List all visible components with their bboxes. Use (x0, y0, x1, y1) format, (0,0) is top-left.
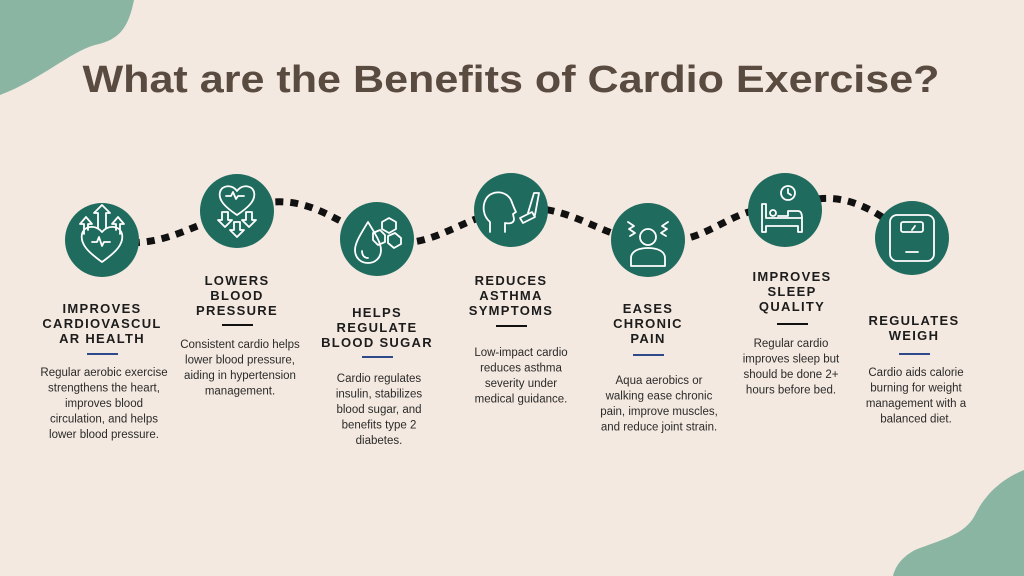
step 5: eases chronic pain (600, 203, 718, 434)
step 7: regulates weight (866, 201, 967, 426)
step 6: improves sleep quality: SLEEP (767, 284, 817, 299)
step 7: regulates weight: management with a (866, 398, 967, 410)
step 5: eases chronic pain: Aqua aerobics or (616, 375, 703, 387)
step 7: regulates weight: balanced diet. (880, 414, 952, 426)
step 3: helps regulate blood sugar: insulin, stabilizes (336, 388, 422, 400)
step 3: helps regulate blood sugar: BLOOD SUGAR (321, 335, 433, 350)
step 4: reduces asthma symptoms: reduces asthma (480, 362, 563, 374)
step 1: improves cardiovascular health: IMPROVES (62, 301, 142, 316)
icon: head and inhaler (484, 192, 539, 232)
step 5: eases chronic pain: PAIN (630, 331, 666, 346)
step 1: improves cardiovascular health: Regular aerobic exercise (40, 367, 168, 379)
step 4: reduces asthma symptoms: SYMPTOMS (469, 303, 553, 318)
step 2: lowers blood pressure: Consistent cardio helps (180, 339, 300, 351)
step 5: eases chronic pain: pain, improve muscles, (600, 406, 718, 418)
step 6: improves sleep quality: should be done 2+ (744, 369, 839, 381)
dotted wave connector (102, 198, 912, 243)
step 5: eases chronic pain: CHRONIC (613, 316, 683, 331)
step 6: improves sleep quality: improves sleep but (743, 354, 840, 366)
step 5: eases chronic pain: and reduce joint strain. (601, 422, 717, 434)
step 2: lowers blood pressure: PRESSURE (196, 303, 278, 318)
step 4: reduces asthma symptoms: Low-impact cardio (474, 347, 568, 359)
blob: bottom-right corner (893, 470, 1024, 576)
step 1: improves cardiovascular health (40, 203, 168, 441)
step 2: lowers blood pressure: BLOOD (210, 288, 264, 303)
step 5: eases chronic pain: walking ease chronic (605, 390, 713, 402)
step 7: regulates weight: burning for weight (870, 382, 963, 394)
step 6: improves sleep quality: hours before bed. (746, 384, 836, 396)
step 5: eases chronic pain: EASES (623, 301, 673, 316)
step 1: improves cardiovascular health: strengthens the heart, (48, 382, 160, 394)
step 4: reduces asthma symptoms: medical guidance. (475, 394, 567, 406)
step 3: helps regulate blood sugar: Cardio regulates (337, 373, 421, 385)
step 2: lowers blood pressure: aiding in hypertension (184, 370, 296, 382)
blob: top-left corner (0, 0, 134, 95)
step 3: helps regulate blood sugar: HELPS (352, 305, 402, 320)
step 1: improves cardiovascular health: circulation, and helps (50, 414, 158, 426)
step 6: improves sleep quality: IMPROVES (752, 269, 832, 284)
icon: heart with down arrows (218, 186, 256, 237)
step 2: lowers blood pressure: lower blood pressure, (185, 354, 295, 366)
icon: drop and sugar cubes (355, 218, 401, 263)
step 6: improves sleep quality: QUALITY (759, 299, 825, 314)
step 7: regulates weight: Cardio aids calorie (868, 367, 964, 379)
icon: scale (890, 215, 934, 261)
icon: person with pain bolts (628, 222, 668, 266)
step 2: lowers blood pressure: LOWERS (205, 273, 269, 288)
step 1: improves cardiovascular health: lower blood pressure. (49, 429, 159, 441)
step 6: improves sleep quality (743, 173, 840, 396)
icon: heart with arrows (80, 205, 124, 262)
step 7: regulates weight: REGULATES (869, 313, 959, 328)
step 4: reduces asthma symptoms: severity under (485, 378, 557, 390)
step 6: improves sleep quality: Regular cardio (754, 338, 828, 350)
step 1: improves cardiovascular health: CARDIOVASCUL (42, 316, 162, 331)
step 3: helps regulate blood sugar: diabetes. (356, 435, 402, 447)
step 7: regulates weight: WEIGH (889, 328, 939, 343)
step 3: helps regulate blood sugar: benefits type 2 (342, 420, 416, 432)
step 1: improves cardiovascular health: improves blood (65, 398, 143, 410)
step 1: improves cardiovascular health: AR HEALTH (59, 331, 145, 346)
title: What are the Benefits of Cardio Exercise? (82, 59, 940, 101)
step 2: lowers blood pressure (180, 174, 300, 398)
step 2: lowers blood pressure: management. (205, 386, 275, 398)
step 4: reduces asthma symptoms: REDUCES (475, 273, 547, 288)
step 3: helps regulate blood sugar: blood sugar, and (336, 404, 422, 416)
step 4: reduces asthma symptoms (469, 173, 568, 406)
step 3: helps regulate blood sugar: REGULATE (337, 320, 417, 335)
icon: bed and clock (762, 186, 802, 232)
step 3: helps regulate blood sugar (321, 202, 433, 447)
step 4: reduces asthma symptoms: ASTHMA (479, 288, 543, 303)
